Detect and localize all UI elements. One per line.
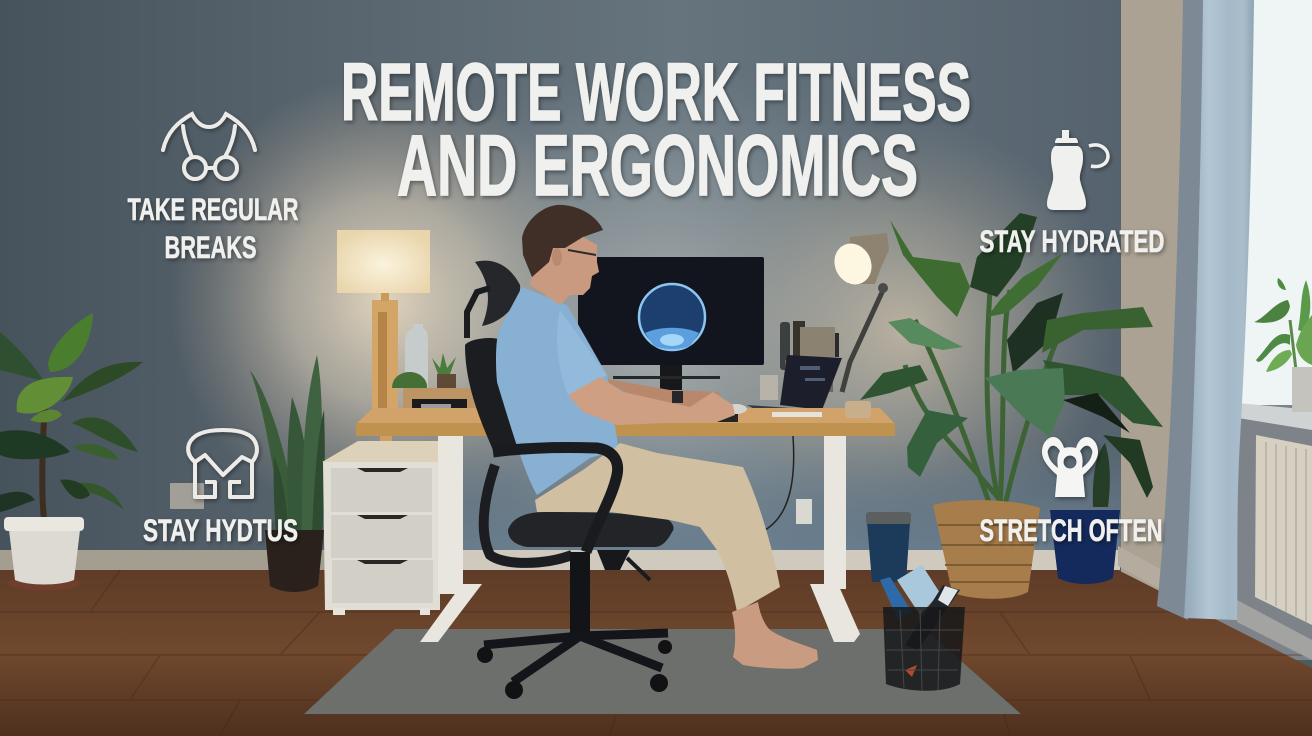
box (403, 388, 478, 418)
small plant (392, 372, 427, 388)
tip: take regular breaks (128, 114, 299, 265)
succulent (432, 353, 456, 374)
icon: water bottle (1047, 130, 1108, 210)
small plant in blue pot (1093, 443, 1110, 507)
desk cable (765, 436, 794, 530)
watch (672, 391, 683, 403)
laptop (747, 355, 842, 418)
table lamp (337, 230, 430, 453)
floor (0, 570, 1312, 736)
plant pot (4, 517, 84, 591)
radiator (1255, 435, 1312, 625)
tip: stay hydtus (143, 430, 298, 548)
icon: stretching figure (1042, 437, 1098, 497)
title: AND ERGONOMICS (397, 118, 918, 214)
far arm (600, 378, 720, 412)
chair stem and base (570, 552, 590, 636)
neck and head (530, 237, 599, 305)
headrest (475, 261, 520, 326)
ear (552, 248, 562, 266)
desk legs (420, 434, 860, 642)
trousers (535, 443, 780, 612)
plant leaves (860, 213, 1163, 498)
monitor planet (639, 284, 705, 350)
chair armrest (493, 447, 618, 552)
person (496, 205, 818, 669)
baseboard (0, 546, 1312, 660)
tip: take regular breaks: BREAKS (164, 229, 256, 265)
snake plant (250, 355, 325, 592)
right side wall (1121, 0, 1312, 660)
drawer unit (322, 441, 440, 615)
lower back frame (484, 465, 572, 563)
mesh basket with rolled mats (880, 565, 965, 691)
chair seat (508, 512, 674, 547)
plant stems (905, 290, 1065, 505)
label: STAY HYDRATED (980, 223, 1164, 259)
window (1238, 0, 1312, 430)
label: STRETCH OFTEN (980, 512, 1162, 548)
foot (732, 602, 818, 669)
desk items left (392, 324, 478, 419)
wall outlet (170, 483, 204, 509)
water tumbler (866, 512, 911, 582)
desk top (356, 408, 895, 436)
blue pot (1050, 510, 1120, 584)
icon: jersey (188, 430, 257, 497)
left plant (0, 313, 143, 591)
plant leaves (0, 313, 143, 520)
chair back (465, 338, 525, 450)
glasses (568, 250, 596, 255)
torso shirt (496, 287, 618, 495)
right big plant (860, 213, 1163, 599)
desk accessories (712, 401, 871, 422)
wicker basket (933, 500, 1040, 599)
hair (522, 205, 603, 277)
label: STAY HYDTUS (143, 512, 298, 548)
label: TAKE REGULAR (128, 191, 299, 227)
window plant (1254, 278, 1312, 412)
glass bottle (405, 324, 428, 388)
outlet (796, 499, 812, 524)
tip: stay hydrated (980, 130, 1164, 259)
office chair (465, 261, 674, 699)
wall background (0, 0, 1125, 600)
icon: stethoscope (163, 114, 255, 179)
monitor (578, 257, 764, 390)
tip: stretch often (980, 437, 1162, 548)
curtain (1157, 0, 1254, 620)
floor rug (304, 629, 1021, 714)
desk right items (760, 321, 839, 400)
near arm (568, 377, 735, 425)
title (341, 47, 971, 214)
desk lamp (828, 233, 889, 392)
